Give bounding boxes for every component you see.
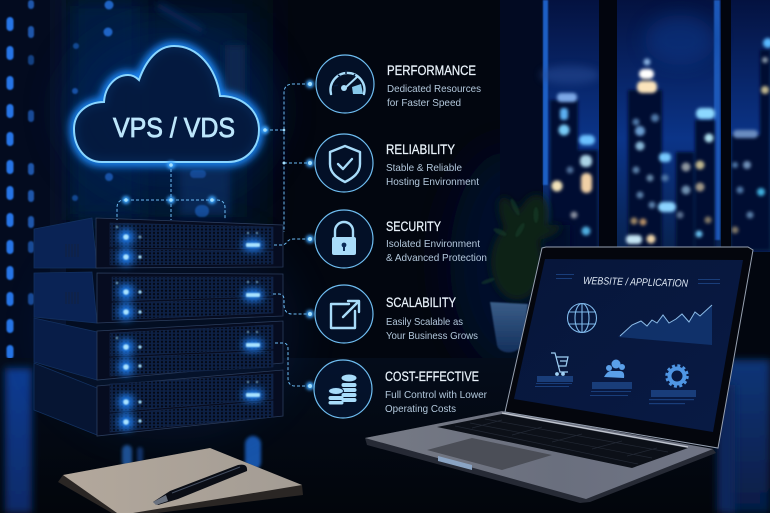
- heading: SECURITY: [386, 219, 441, 234]
- feature: performance: [316, 55, 481, 113]
- drive slots on server sides: [66, 244, 78, 304]
- blurred towers: [550, 50, 770, 250]
- heading: PERFORMANCE: [387, 63, 476, 78]
- description: Your Business Grows: [386, 330, 478, 342]
- icon: globe: [568, 304, 596, 332]
- description: Dedicated Resources: [387, 83, 481, 95]
- window frames: [599, 0, 617, 252]
- icon: expand arrow: [315, 285, 373, 343]
- plant pot: [490, 302, 528, 352]
- icon: users: [604, 360, 625, 378]
- silver hinge line: [502, 413, 688, 447]
- server stack: [34, 218, 300, 440]
- status LEDs: [116, 226, 260, 425]
- server 3: [34, 318, 283, 380]
- description: [386, 316, 478, 342]
- icon: shield with check: [315, 134, 373, 192]
- feature: security: [315, 210, 487, 268]
- icon: padlock: [315, 210, 373, 268]
- description: Isolated Environment: [386, 238, 480, 250]
- icon: shopping cart: [551, 353, 568, 375]
- city skyline window: [500, 0, 770, 252]
- server 2: [34, 272, 283, 323]
- feature: cost-effective: [314, 360, 487, 418]
- server rack lights on the left: [6, 0, 209, 359]
- icon: speedometer: [316, 55, 374, 113]
- description: Full Control with Lower: [385, 389, 487, 401]
- description: [386, 162, 479, 188]
- heading: SCALABILITY: [386, 295, 456, 310]
- description: [385, 389, 487, 415]
- screen bezel: [505, 247, 753, 448]
- notebook: [58, 448, 303, 513]
- connectors from cloud and servers: [117, 80, 314, 390]
- line chart: [618, 305, 712, 345]
- description: [387, 83, 481, 109]
- front notch: [438, 456, 472, 470]
- description: Operating Costs: [385, 403, 456, 415]
- icon: coin stacks: [314, 360, 372, 418]
- keyboard: [437, 414, 688, 468]
- icon: gear: [666, 366, 688, 386]
- notebook with pen: [58, 448, 303, 513]
- description: for Faster Speed: [387, 97, 461, 109]
- laptop: [365, 247, 753, 503]
- screen title: WEBSITE / APPLICATION: [583, 275, 689, 290]
- feature: scalability: [315, 285, 478, 343]
- description: Stable & Reliable: [386, 162, 462, 174]
- mini bar panels: [535, 274, 720, 404]
- table surface: [0, 358, 770, 513]
- laptop base: [365, 411, 716, 503]
- bright tower lights: [552, 38, 770, 244]
- description: Easily Scalable as: [386, 316, 463, 328]
- heading: COST-EFFECTIVE: [385, 369, 479, 384]
- description: & Advanced Protection: [386, 252, 487, 264]
- cloud label: VPS / VDS: [113, 112, 235, 143]
- heading: RELIABILITY: [386, 142, 455, 157]
- description: [386, 238, 487, 264]
- server 1: [34, 218, 283, 268]
- server 4: [34, 363, 283, 436]
- cloud with VPS / VDS label: [74, 46, 259, 162]
- cloud outline: [74, 46, 259, 162]
- status LED glows: [118, 229, 263, 430]
- description: Hosting Environment: [386, 176, 479, 188]
- screen: [514, 259, 743, 432]
- feature: reliability: [315, 134, 479, 192]
- pen: [153, 465, 247, 505]
- trackpad: [427, 438, 552, 470]
- potted plant: [481, 191, 570, 355]
